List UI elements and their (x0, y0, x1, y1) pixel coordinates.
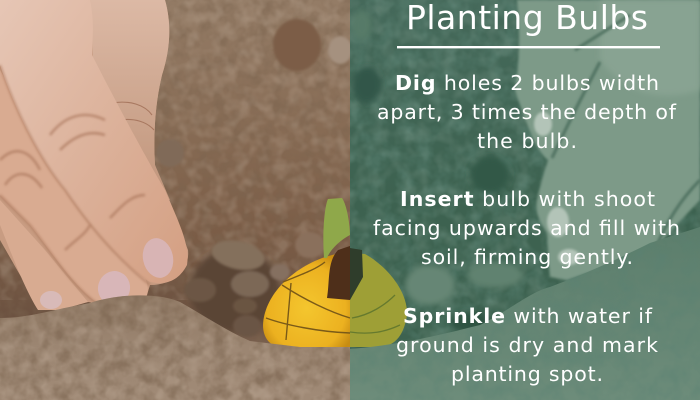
bulb neck (327, 246, 350, 300)
hand highlight (600, 0, 700, 96)
shoot (323, 198, 350, 258)
nail: little finger (40, 291, 62, 309)
knuckle creases (112, 102, 154, 130)
text block: dig: apart, 3 times the depth of (377, 100, 677, 124)
text block: insert: Insert bulb with shoot (400, 187, 655, 211)
soil clods (156, 19, 352, 337)
nail: middle finger (98, 271, 130, 300)
text block: dig: Dig holes 2 bulbs width (395, 71, 659, 95)
text block: sprinkle: planting spot. (451, 362, 603, 386)
panel: green overlay with faded photo (350, 0, 700, 400)
little finger (0, 200, 88, 310)
faded front soil mound (350, 220, 700, 400)
bulb body (263, 250, 350, 347)
text block: dig: the bulb. (477, 129, 577, 153)
faded fingernails (534, 112, 552, 136)
nail: index finger (142, 238, 174, 278)
front soil mound (0, 290, 350, 400)
back finger (90, 0, 170, 200)
finger shading (0, 115, 145, 250)
finger separation (0, 65, 150, 304)
text block: insert: soil, firming gently. (421, 245, 633, 269)
text block: sprinkle (396, 304, 658, 386)
text block: sprinkle: ground is dry and mark (396, 333, 658, 357)
text block: dig (377, 71, 677, 153)
hand base (0, 0, 188, 310)
hand shadows (552, 15, 700, 250)
faded soil clods (352, 10, 523, 332)
title underline (397, 46, 660, 48)
middle finger (0, 70, 148, 307)
fingernails (40, 235, 177, 309)
panel texture (350, 0, 698, 348)
photo: hand planting a bulb in soil (0, 0, 352, 400)
faded bulb (350, 253, 407, 347)
text block: sprinkle: Sprinkle with water if (403, 304, 653, 328)
index finger (0, 0, 188, 283)
bulb (263, 198, 350, 347)
soil texture (19, 0, 350, 314)
text block: insert (373, 187, 680, 269)
text block: insert: facing upwards and fill with (373, 216, 680, 240)
faded hand (515, 0, 700, 280)
